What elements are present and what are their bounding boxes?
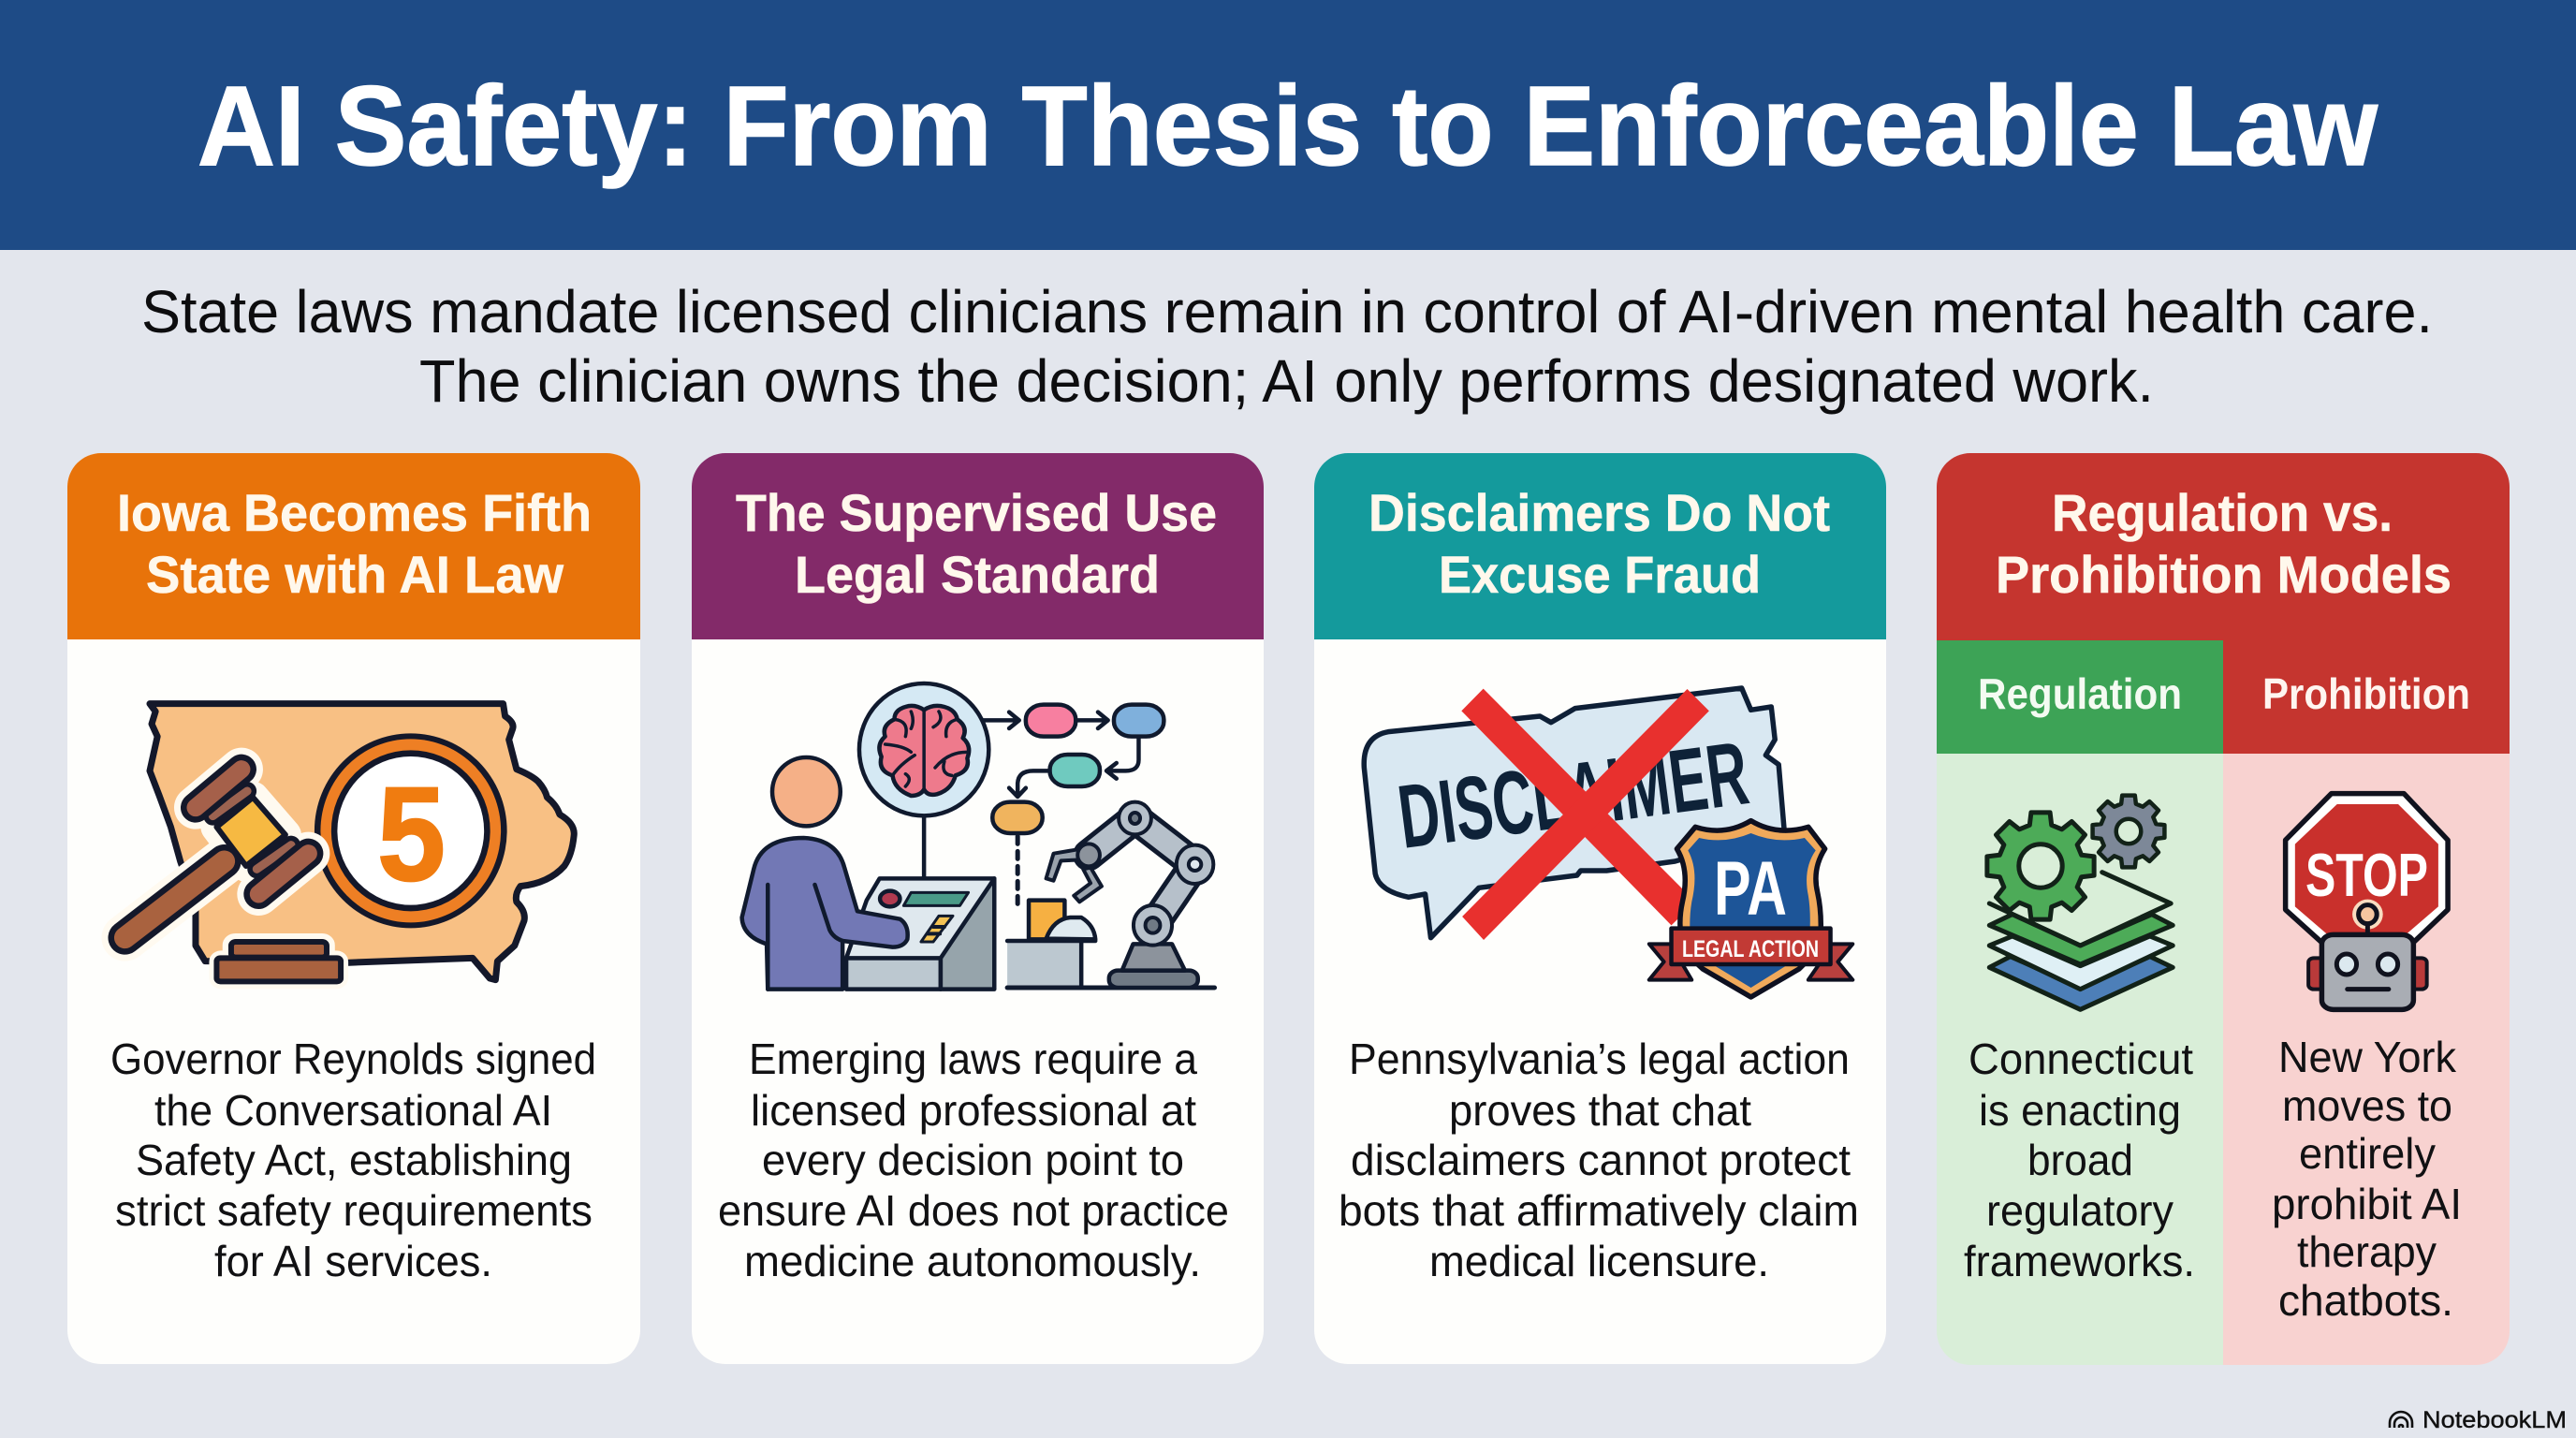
body text: regulation bbox=[1964, 1034, 2195, 1285]
heading: disclaimers card: Disclaimers Do Not bbox=[1368, 483, 1830, 542]
body text: supervised use card bbox=[718, 1034, 1229, 1285]
heading: Iowa card bbox=[117, 483, 592, 604]
body text: regulation: regulatory bbox=[1986, 1186, 2174, 1235]
heading: supervised use card: Legal Standard bbox=[795, 545, 1160, 604]
icon: stop sign and robot: STOP bbox=[2305, 841, 2428, 909]
body text: Iowa card: Safety Act, establishing bbox=[136, 1136, 572, 1184]
body text: regulation: is enacting bbox=[1979, 1086, 2181, 1135]
icon: Iowa map, gavel and number five bbox=[124, 704, 574, 981]
body text: disclaimers card: bots that affirmatively claim bbox=[1339, 1186, 1859, 1235]
body text: regulation: frameworks. bbox=[1964, 1237, 2195, 1285]
body text: regulation: broad bbox=[2027, 1136, 2133, 1184]
icon: crossed-out disclaimer bubble and PA legal action shield bbox=[1364, 688, 1852, 997]
body text: prohibition: moves to bbox=[2282, 1081, 2452, 1130]
column: prohibition bbox=[2223, 669, 2510, 1365]
heading: disclaimers card: Excuse Fraud bbox=[1439, 545, 1761, 604]
body text: supervised use card: licensed professional at bbox=[751, 1086, 1196, 1135]
body text: disclaimers card bbox=[1339, 1034, 1859, 1285]
body text: disclaimers card: proves that chat bbox=[1449, 1086, 1751, 1135]
body text: prohibition: chatbots. bbox=[2278, 1276, 2453, 1325]
body text: prohibition: entirely bbox=[2299, 1129, 2436, 1178]
heading: regulation vs prohibition card bbox=[1996, 483, 2452, 604]
heading: regulation vs prohibition card: Regulation vs. bbox=[2052, 483, 2393, 542]
subtitle bbox=[141, 278, 2433, 415]
title banner: AI Safety: From Thesis to Enforceable Law bbox=[198, 62, 2378, 189]
footer: NotebookLM mark: NotebookLM bbox=[2422, 1407, 2567, 1433]
title banner bbox=[0, 0, 2576, 250]
body text: regulation: Connecticut bbox=[1969, 1034, 2193, 1083]
body text: Iowa card bbox=[110, 1034, 596, 1285]
sub-heading: regulation: Regulation bbox=[1978, 669, 2182, 718]
panel: supervised use legal standard bbox=[692, 453, 1264, 1364]
column: regulation bbox=[1937, 640, 2223, 1365]
heading: supervised use card bbox=[736, 483, 1217, 604]
sub-heading: prohibition: Prohibition bbox=[2262, 669, 2470, 718]
heading: disclaimers card bbox=[1368, 483, 1830, 604]
panel: disclaimers do not excuse fraud bbox=[1314, 453, 1886, 1364]
icon: clinician supervising AI workflow and robot arm bbox=[742, 683, 1215, 990]
body text: Iowa card: the Conversational AI bbox=[154, 1086, 552, 1135]
body text: disclaimers card: Pennsylvania’s legal action bbox=[1349, 1034, 1850, 1083]
body text: Iowa card: Governor Reynolds signed bbox=[110, 1034, 596, 1083]
body text: supervised use card: Emerging laws require a bbox=[749, 1034, 1197, 1083]
icon: crossed-out disclaimer bubble and PA legal action shield: PA bbox=[1714, 846, 1787, 932]
body text: prohibition: prohibit AI bbox=[2272, 1180, 2462, 1228]
icon: crossed-out disclaimer bubble and PA legal action shield: LEGAL ACTION bbox=[1682, 936, 1819, 962]
icon: Iowa map, gavel and number five: 5 bbox=[377, 760, 446, 909]
body text: supervised use card: ensure AI does not practice bbox=[718, 1186, 1229, 1235]
heading: supervised use card: The Supervised Use bbox=[736, 483, 1217, 542]
icon: stop sign and robot bbox=[2286, 794, 2448, 1009]
body text: disclaimers card: medical licensure. bbox=[1429, 1237, 1769, 1285]
subtitle: State laws mandate licensed clinicians remain in control of AI-driven mental health care. bbox=[141, 278, 2433, 345]
heading: Iowa card: Iowa Becomes Fifth bbox=[117, 483, 592, 542]
body text: supervised use card: medicine autonomously. bbox=[744, 1237, 1201, 1285]
body text: Iowa card: for AI services. bbox=[214, 1237, 492, 1285]
body text: Iowa card: strict safety requirements bbox=[115, 1186, 593, 1235]
heading: regulation vs prohibition card: Prohibition Models bbox=[1996, 545, 2452, 604]
heading: Iowa card: State with AI Law bbox=[146, 545, 564, 604]
body text: prohibition: therapy bbox=[2297, 1227, 2437, 1276]
icon: crossed-out disclaimer bubble and PA legal action shield: DISCLAIMER bbox=[1393, 723, 1754, 868]
panel: regulation vs prohibition models bbox=[1937, 453, 2510, 1365]
subtitle: The clinician owns the decision; AI only performs designated work. bbox=[419, 347, 2154, 415]
body text: disclaimers card: disclaimers cannot protect bbox=[1351, 1136, 1851, 1184]
panel: Iowa becomes fifth state bbox=[67, 453, 640, 1364]
body text: prohibition bbox=[2272, 1033, 2462, 1325]
body text: prohibition: New York bbox=[2278, 1033, 2457, 1081]
icon: gears on policy layers bbox=[1987, 796, 2173, 1009]
body text: supervised use card: every decision point to bbox=[762, 1136, 1184, 1184]
